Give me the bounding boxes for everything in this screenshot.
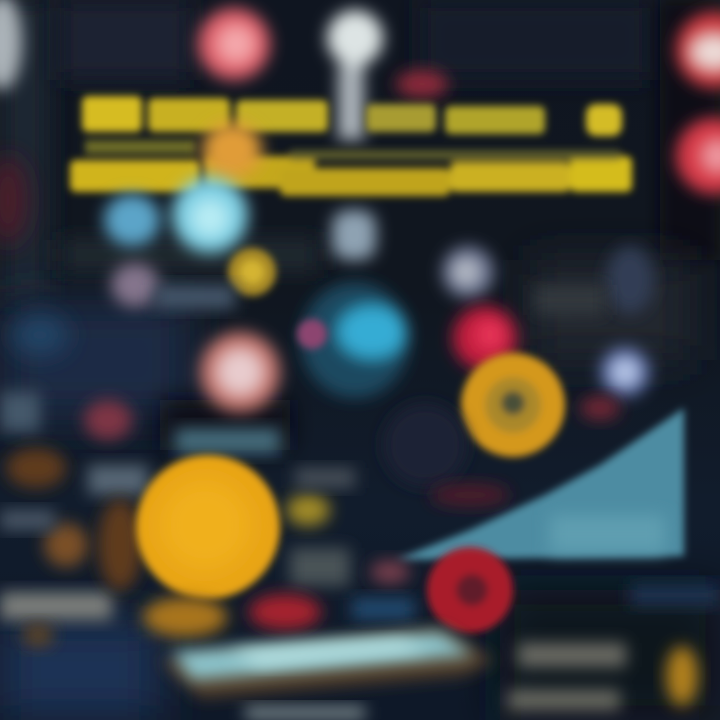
icon: small pink marker [370,560,410,584]
area chart [395,408,684,560]
panel: grey strips [290,548,350,586]
icon: top-left white blob [0,0,22,90]
icon: pale pink blob [111,263,159,307]
icon: small magenta badge [297,319,327,349]
icon: small red marker [580,396,620,420]
icon: gold ring coin [461,353,565,457]
icon: grey-blue shape right [606,246,654,314]
panel: pale row [295,468,355,488]
panel: pale stacked strip [0,592,112,620]
icon: dark red base under globe [430,483,510,507]
panel: blue strip right [630,584,720,606]
icon: white and blue badge [600,347,650,397]
icon: dark globe [383,403,467,487]
panel: stacked pages right [508,643,626,710]
icon: red badge [453,306,517,370]
icon: yellow coin [228,248,276,296]
icon: red pink badge [84,400,132,440]
icon: brown block [6,448,66,488]
panel: blue strip [352,598,414,620]
icon: left grey panel [0,392,40,432]
icon: light blue cloud [104,177,248,253]
icon: left dark red glow [0,156,28,244]
icon: blue patch left [12,315,68,355]
icon: amber lamp [666,646,698,706]
icon: small brown tag [22,623,54,647]
icon: red donut [427,547,513,633]
chart highlight [550,515,665,553]
icon: small yellow piece [286,494,330,526]
panel: pale strip [88,465,148,495]
icon: brown block lower [44,523,88,567]
title: illegible yellow lettering [70,96,632,196]
icon: small red arc behind title [396,70,448,98]
icon: pink-white circular badge [200,332,280,412]
icon: white glowing column [327,10,383,260]
icon: big yellow coin [98,455,280,637]
panel: grey strip beside pink blob [155,285,235,309]
panel: teal strip [175,428,280,454]
icon: top-right red and white badge [676,12,720,88]
panel: grey-white strip [0,510,55,530]
icon: right red and pink badge [676,118,720,194]
icon: pale round badge [442,246,494,298]
panel: bottom pale strip [245,706,365,720]
icon: blue bird badge [301,282,409,398]
open book [160,628,495,698]
icon: grey shape beside [535,285,605,315]
icon: pink circle top [198,8,270,80]
icon: red tag [249,594,321,630]
icon: orange glow over title [202,122,262,178]
